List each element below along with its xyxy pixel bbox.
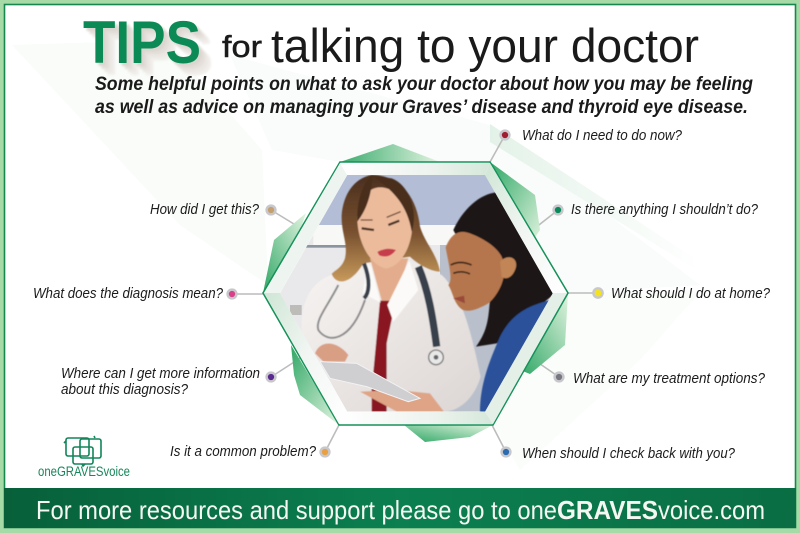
hair	[332, 175, 440, 281]
patient	[446, 192, 555, 413]
logo icon: speech bubbles	[64, 436, 101, 466]
doctor	[301, 175, 481, 412]
question labels: Is there anything I shouldn’t do?	[571, 201, 759, 218]
question labels: about this diagnosis?	[61, 381, 189, 398]
footer banner	[4, 488, 796, 528]
logo: oneGRAVESvoice	[38, 436, 130, 479]
title	[83, 9, 699, 88]
stethoscope	[418, 267, 437, 347]
subtitle: as well as advice on managing your Graves’ disease and thyroid eye disease.	[95, 97, 748, 118]
footer text: For more resources and support please go to one	[36, 495, 557, 525]
footer text: GRAVES	[557, 495, 658, 525]
title word: TIPS: TIPS	[83, 9, 201, 76]
title text: talking to your doctor: talking to your doctor	[271, 19, 699, 72]
title shadow: TIPS: TIPS	[95, 21, 213, 88]
photo: doctor and patient	[273, 170, 560, 417]
logo text: oneGRAVESvoice	[38, 464, 130, 479]
subtitle	[95, 74, 753, 118]
question labels: What does the diagnosis mean?	[33, 285, 224, 302]
green hexagon accents	[263, 144, 568, 442]
top	[372, 301, 396, 412]
hexagon frame	[263, 162, 568, 425]
footer text: voice.com	[658, 495, 765, 525]
question labels: What are my treatment options?	[573, 370, 766, 387]
question labels	[33, 127, 771, 462]
connector lines	[232, 135, 598, 452]
question labels: How did I get this?	[150, 201, 260, 218]
tablet	[320, 362, 420, 402]
question labels: What should I do at home?	[611, 285, 771, 302]
question labels: When should I check back with you?	[522, 445, 736, 462]
photo background	[273, 170, 560, 417]
title word: for: for	[222, 29, 262, 64]
coat	[301, 261, 481, 412]
hands	[315, 344, 348, 362]
title shadow: TIPS: TIPS	[86, 12, 204, 79]
face	[357, 187, 412, 268]
question labels: Where can I get more information	[61, 365, 260, 382]
collar	[387, 261, 418, 322]
question labels: Is it a common problem?	[170, 443, 317, 460]
title shadow: TIPS: TIPS	[89, 15, 207, 82]
neck	[370, 258, 408, 301]
question labels: What do I need to do now?	[522, 127, 683, 144]
subtitle: Some helpful points on what to ask your doctor about how you may be feeling	[95, 74, 753, 95]
question markers	[228, 131, 603, 456]
title shadow: TIPS: TIPS	[92, 18, 210, 85]
decorative background fan	[12, 40, 702, 470]
